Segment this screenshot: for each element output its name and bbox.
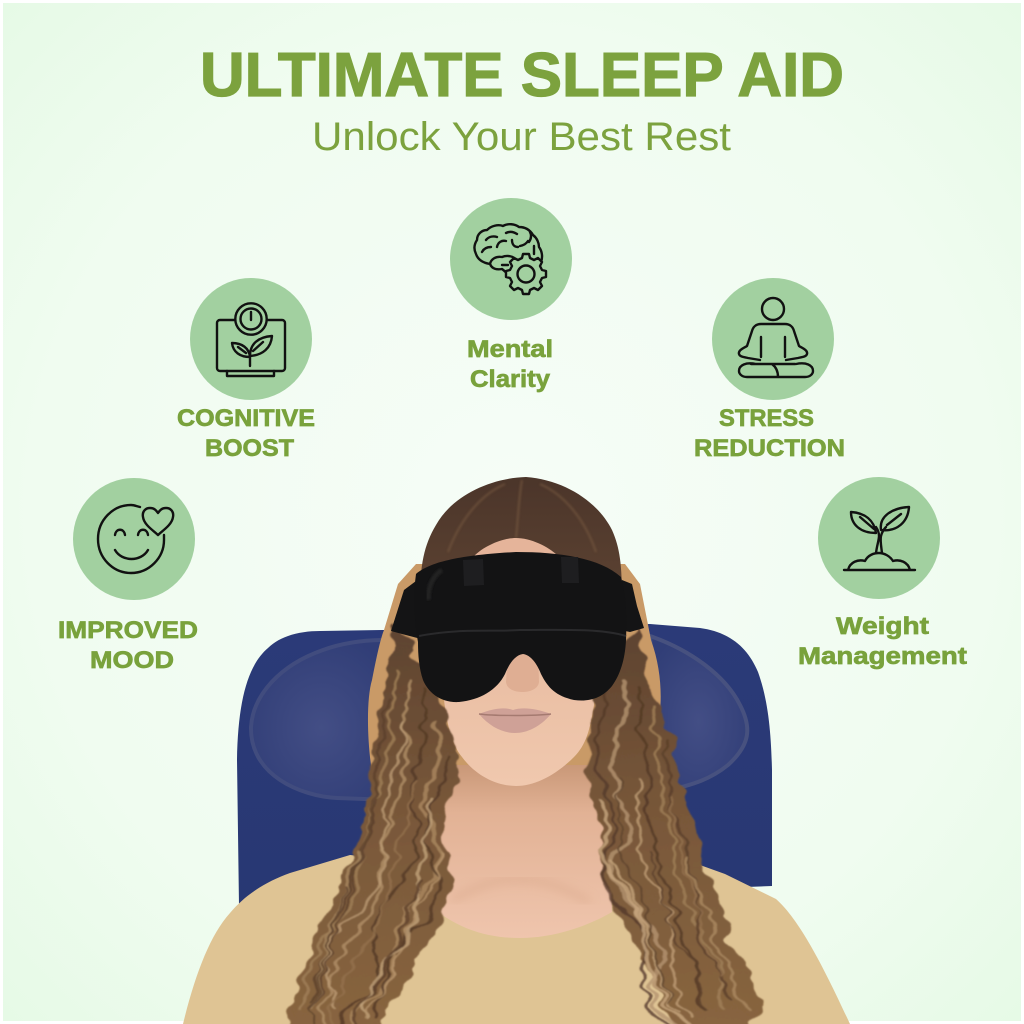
benefit: cognitive boost xyxy=(177,278,315,462)
mask side straps xyxy=(391,578,644,640)
collarbone shading xyxy=(452,880,590,902)
title: ULTIMATE SLEEP AID xyxy=(200,41,844,110)
label xyxy=(467,336,553,393)
label: IMPROVED xyxy=(58,617,198,644)
label xyxy=(694,405,845,462)
sweater xyxy=(183,855,850,1024)
label: STRESS xyxy=(719,405,814,432)
icon circle: meditation figure xyxy=(712,278,834,400)
neck and chest xyxy=(430,765,612,938)
sleep mask xyxy=(414,552,626,702)
headrest pad left xyxy=(251,640,392,800)
nose xyxy=(506,652,539,692)
benefit: stress reduction xyxy=(694,278,845,462)
benefit: weight management xyxy=(798,477,967,670)
lips xyxy=(479,708,551,733)
left hair xyxy=(284,625,459,1024)
label: Clarity xyxy=(470,366,551,393)
hair crown xyxy=(420,477,622,600)
label: REDUCTION xyxy=(694,435,845,462)
benefit: mental clarity xyxy=(450,198,572,393)
icon circle: smiley with heart xyxy=(73,478,195,600)
label xyxy=(177,405,315,462)
label: BOOST xyxy=(205,435,294,462)
label: Weight xyxy=(836,613,929,640)
forehead xyxy=(474,538,558,556)
right hair xyxy=(587,630,762,1024)
photo: woman wearing sleep mask on a seat xyxy=(183,477,850,1024)
label: MOOD xyxy=(90,647,174,674)
label: Mental xyxy=(467,336,553,363)
neck pillow xyxy=(368,564,661,780)
headrest pad right xyxy=(650,636,747,792)
icon circle: brain and gear xyxy=(450,198,572,320)
hair part xyxy=(448,480,596,552)
face xyxy=(440,650,598,786)
icon circle: scale with plant xyxy=(190,278,312,400)
label xyxy=(798,613,967,670)
benefit: improved mood xyxy=(58,478,198,674)
label xyxy=(58,617,198,674)
label: Management xyxy=(798,643,967,670)
label: COGNITIVE xyxy=(177,405,315,432)
icon circle: sprout xyxy=(818,477,940,599)
airplane seat back xyxy=(237,624,772,906)
subtitle: Unlock Your Best Rest xyxy=(312,115,731,159)
